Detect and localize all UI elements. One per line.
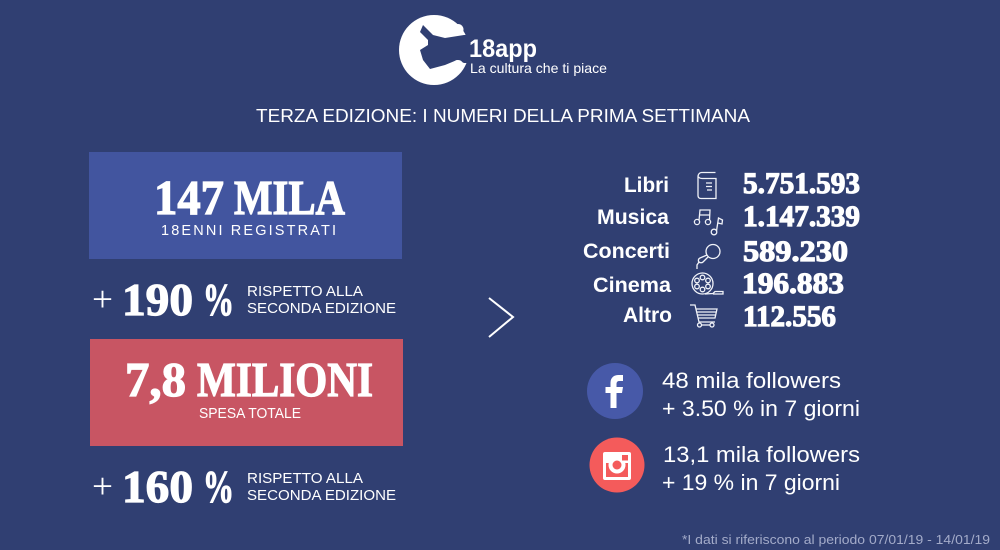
text: facebook followers: + 3.50 % in 7 giorni — [662, 396, 860, 421]
stat: plus 160 percent: SECONDA EDIZIONE — [247, 488, 396, 504]
icon: facebook — [587, 363, 643, 419]
stat: plus 160 percent — [92, 461, 396, 512]
stat: plus 160 percent: % — [203, 461, 234, 512]
row: Cinema: Cinema — [593, 274, 671, 297]
row: Altro — [623, 300, 836, 333]
arrow: chevron — [489, 298, 513, 337]
row: Libri — [624, 167, 860, 200]
text: facebook followers — [662, 368, 860, 421]
stat: plus 190 percent: SECONDA EDIZIONE — [247, 301, 396, 317]
row: Concerti: 589.230 — [743, 235, 848, 268]
footnote: *I dati si riferiscono al periodo 07/01/19 - 14/01/19 — [682, 533, 990, 547]
row: Cinema: 196.883 — [742, 267, 844, 300]
stat: plus 190 percent: RISPETTO ALLA — [247, 284, 363, 300]
panel: registered users — [89, 152, 402, 259]
logo: 18app: La cultura che ti piace — [470, 60, 607, 76]
row: Musica: 1.147.339 — [743, 200, 860, 233]
text: instagram followers: 13,1 mila followers — [663, 442, 860, 467]
row: Musica — [597, 200, 860, 235]
icon: instagram — [590, 438, 644, 492]
panel: total spending: MILIONI — [197, 352, 373, 407]
row: Concerti: Concerti — [583, 240, 670, 263]
row: Cinema — [593, 267, 844, 300]
stat: plus 190 percent: 190 — [122, 274, 193, 325]
logo: 18app: 18app — [469, 35, 537, 63]
panel: total spending: 7,8 — [125, 352, 186, 407]
panel: registered users: 18ENNI REGISTRATI — [161, 223, 336, 239]
text: instagram followers: + 19 % in 7 giorni — [662, 470, 840, 495]
panel: registered users: 147 — [154, 170, 224, 225]
stat: plus 190 percent — [92, 274, 396, 325]
row: Altro: Altro — [623, 304, 672, 327]
row: Musica: Musica — [597, 206, 669, 229]
title: TERZA EDIZIONE: I NUMERI DELLA PRIMA SETTIMANA — [256, 106, 750, 126]
stat: plus 160 percent: 160 — [122, 461, 193, 512]
stat: plus 190 percent: % — [203, 274, 234, 325]
row: Libri: Libri — [624, 174, 669, 197]
logo: 18app — [399, 15, 607, 85]
row: Libri: 5.751.593 — [743, 167, 860, 200]
stat: plus 190 percent: + — [92, 279, 113, 319]
text: facebook followers: 48 mila followers — [662, 368, 841, 393]
stat: plus 160 percent: + — [92, 466, 113, 506]
panel: registered users: MILA — [234, 170, 346, 225]
stat: plus 160 percent: RISPETTO ALLA — [247, 471, 363, 487]
row: Altro: 112.556 — [743, 300, 836, 333]
text: instagram followers — [662, 442, 860, 495]
row: Concerti — [583, 235, 848, 269]
panel: total spending: SPESA TOTALE — [199, 406, 301, 422]
panel: total spending — [90, 339, 403, 446]
